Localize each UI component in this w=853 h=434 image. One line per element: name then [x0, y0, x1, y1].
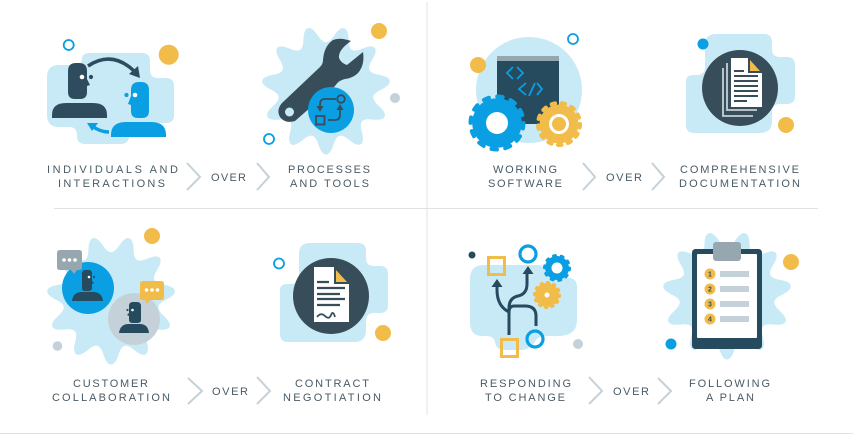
label: processes and tools: PROCESSES [288, 164, 370, 176]
label: over: OVER [606, 172, 642, 184]
label: working software: SOFTWARE [488, 178, 562, 190]
illustration: clipboard plan: 4 [708, 316, 712, 324]
label: processes and tools: AND TOOLS [290, 178, 369, 190]
panel: customer collaboration over contract negotiation [50, 228, 391, 404]
label: processes and tools [288, 164, 370, 190]
label: following a plan [689, 378, 770, 404]
illustration: clipboard plan [666, 235, 799, 357]
arrow: chevron [589, 377, 602, 404]
illustration: code window and gears [470, 34, 582, 150]
arrow: chevron [257, 377, 270, 404]
label: working software: WORKING [493, 164, 557, 176]
illustration: clipboard plan: 2 [708, 286, 712, 294]
label: comprehensive documentation [679, 164, 800, 190]
label: working software [488, 164, 562, 190]
label: customer collaboration: COLLABORATION [52, 392, 170, 404]
label: individuals and interactions [47, 164, 178, 190]
label: over: OVER [212, 386, 248, 398]
illustration: clipboard plan: 1 [708, 272, 712, 278]
arrow: chevron [187, 163, 200, 190]
label: customer collaboration: CUSTOMER [73, 378, 148, 390]
label: responding to change: TO CHANGE [485, 392, 565, 404]
label: following a plan: A PLAN [706, 392, 754, 404]
label: over: OVER [211, 172, 246, 184]
illustration: branching arrows and gears [468, 246, 583, 356]
panel: individuals and interactions over processes and tools [47, 23, 400, 190]
label: individuals and interactions: INTERACTIONS [58, 178, 165, 190]
label: responding to change [480, 378, 571, 404]
label: individuals and interactions: INDIVIDUALS AND [47, 164, 178, 176]
panel: responding to change over following a plan [468, 235, 799, 404]
label: comprehensive documentation: DOCUMENTATION [679, 178, 800, 190]
arrow: chevron [188, 378, 202, 404]
label: comprehensive documentation: COMPREHENSIVE [680, 164, 799, 176]
label: customer collaboration [52, 378, 170, 404]
illustration: wrench and process [264, 23, 400, 152]
illustration: conversation between two people [50, 228, 172, 362]
illustration: two people exchanging [47, 40, 179, 144]
label: contract negotiation: NEGOTIATION [283, 392, 381, 404]
label: following a plan: FOLLOWING [689, 378, 770, 390]
label: contract negotiation: CONTRACT [295, 378, 369, 390]
arrow: chevron [583, 163, 595, 190]
arrow: chevron [257, 163, 269, 190]
illustration: contract [274, 243, 391, 342]
illustration: clipboard plan: 3 [708, 302, 712, 308]
label: over: OVER [613, 386, 649, 398]
arrow: chevron [652, 163, 664, 190]
label: responding to change: RESPONDING [480, 378, 571, 390]
label: contract negotiation [283, 378, 381, 404]
illustration: documents [686, 34, 795, 133]
arrow: chevron [658, 378, 671, 404]
panel: working software over comprehensive documentation [470, 34, 800, 190]
